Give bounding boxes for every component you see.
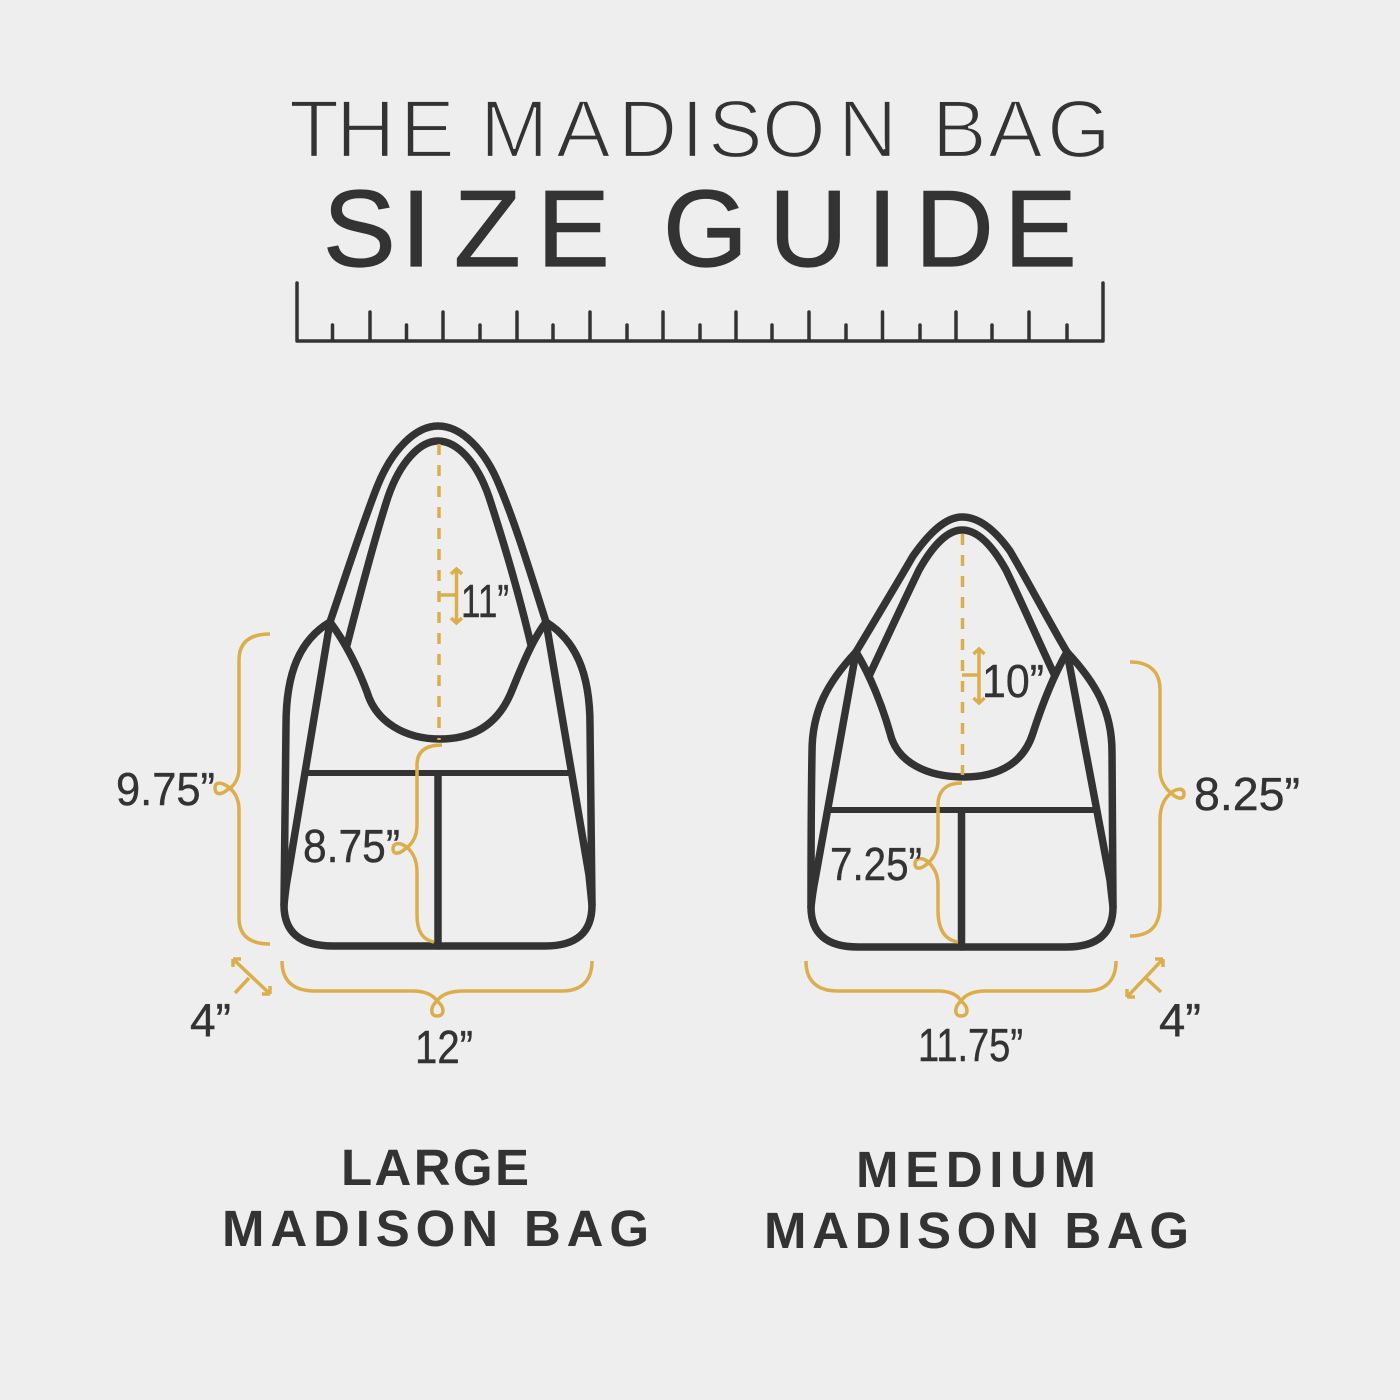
ruler [297,283,1103,341]
medium bag centre seam [958,812,965,947]
large bag measurements [215,444,592,1016]
heading: size guide: SIZE GUIDE [323,168,1077,290]
medium bag pocket seam [830,807,1094,813]
medium bag right strap [1067,652,1113,907]
brace: large height 9.75 [215,634,270,944]
label: medium depth 4 in: 4” [1159,994,1201,1046]
medium bag inner handle [870,530,1054,674]
arrow: large depth 4 [233,959,270,994]
caption: medium madison bag [764,1141,1189,1259]
dashed line: large handle drop [437,444,441,740]
large bag pocket seam [308,770,568,776]
label: 7.25 in: 7.25” [830,838,922,890]
medium bag opening [856,652,1067,777]
label: large depth 4 in: 4” [190,994,231,1046]
large bag inner handle [347,441,531,645]
large bag opening [330,622,546,739]
large bag centre seam [434,775,442,946]
brace: large width 12 [282,961,592,1016]
caption: large madison bag: MADISON BAG [222,1200,649,1257]
arrow: medium depth 4 [1127,959,1163,997]
label: 11 in: 11” [461,575,509,627]
label: 8.75 in: 8.75” [303,820,400,872]
large bag body [284,622,592,946]
label: 8.25 in: 8.25” [1194,768,1300,820]
large bag outer handle [330,426,546,622]
caption: large madison bag [222,1139,649,1257]
medium bag body [811,652,1113,947]
medium bag left strap [811,652,856,907]
medium bag outer handle [856,517,1067,652]
caption: large madison bag: LARGE [341,1139,529,1196]
title: the madison bag: THE MADISON BAG [289,84,1111,175]
medium bag measurements [806,534,1184,1016]
large bag illustration [284,426,592,946]
label: 10 in: 10” [982,655,1044,707]
large bag right strap [546,622,592,905]
brace: medium pocket 7.25 [915,783,962,942]
label: 12 in: 12” [415,1021,473,1073]
brace: medium height 8.25 [1130,662,1184,936]
label: 11.75 in: 11.75” [918,1019,1023,1071]
brace: large pocket 8.75 [393,745,442,942]
brace: medium width 11.75 [806,961,1116,1016]
caption: medium madison bag: MEDIUM [856,1141,1096,1198]
arrow: large handle 11 [439,569,462,623]
arrow: medium handle 10 [962,649,984,703]
caption: medium madison bag: MADISON BAG [764,1202,1189,1259]
dashed line: medium handle drop [961,534,964,775]
large bag left strap [284,622,330,905]
medium bag illustration [811,517,1113,947]
label: 9.75 in: 9.75” [116,763,215,815]
